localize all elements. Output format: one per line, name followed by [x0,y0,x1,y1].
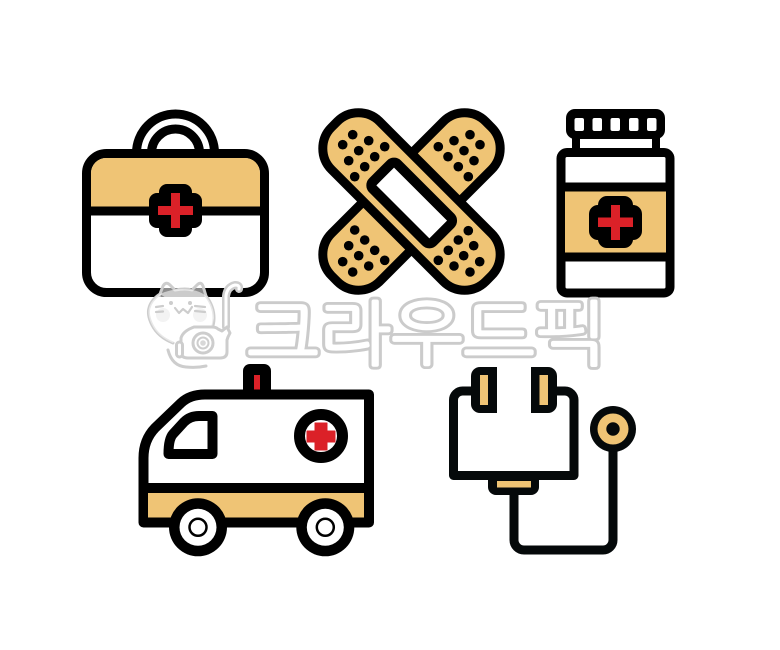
watermark: brand text outline: 크라우드픽 [247,299,607,370]
icon: medicine bottle [561,109,670,293]
icon: crossed bandages [310,100,513,303]
icon: first aid kit [86,114,264,292]
icon: stethoscope [454,367,636,550]
icon: ambulance [144,364,369,556]
watermark: brand text outline: 크라우드픽 [247,299,607,370]
watermark: cat with camera [148,283,239,367]
